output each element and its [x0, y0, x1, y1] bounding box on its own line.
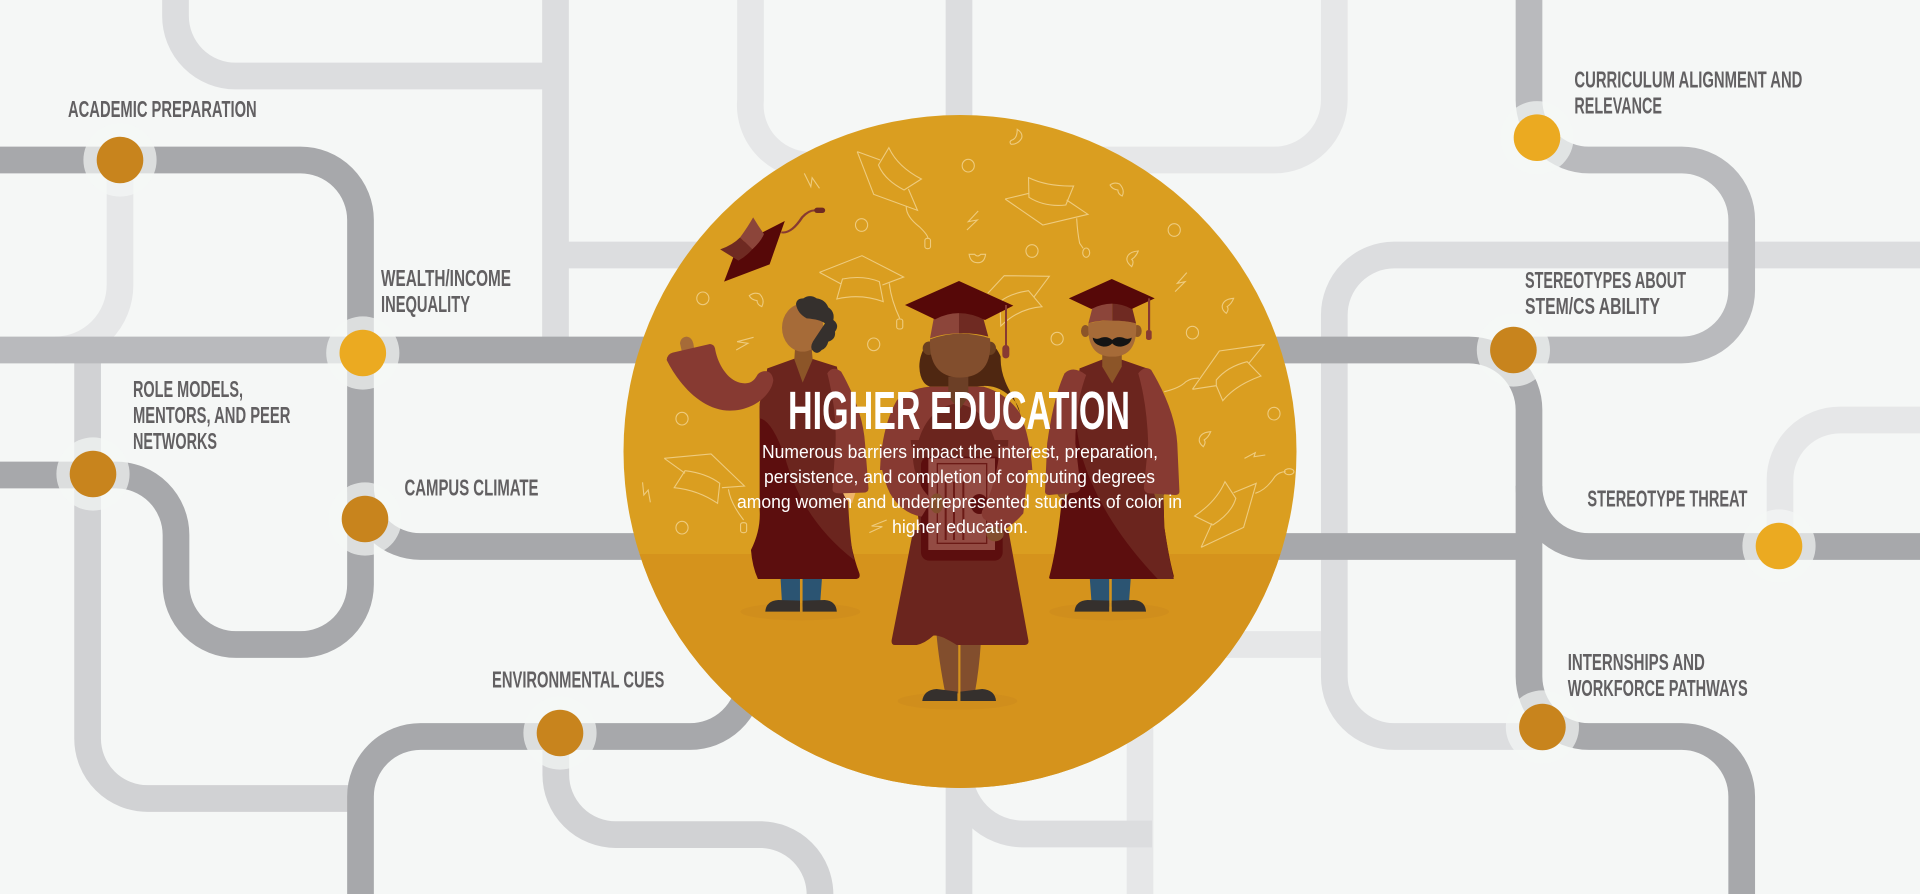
node: internships and workforce pathways [1506, 649, 1748, 764]
title: HIGHER EDUCATION [788, 381, 1130, 441]
node: role models [56, 376, 290, 511]
description text: Numerous barriers impact the interest, preparation, [762, 442, 1158, 462]
description text: among women and underrepresented students of color in [737, 492, 1182, 512]
doodles: flying caps, circles, squiggles [643, 129, 1294, 547]
node: academic preparation [68, 96, 257, 197]
mid-tone network lines [0, 0, 1742, 350]
figure: left graduate [667, 296, 868, 620]
node: curriculum alignment: RELEVANCE [1574, 93, 1662, 119]
figure: right graduate [1045, 279, 1179, 620]
description text: persistence, and completion of computing degrees [764, 467, 1155, 487]
node: stereotype threat: STEREOTYPE THREAT [1587, 486, 1748, 512]
node: internships and workforce pathways: WORKFORCE PATHWAYS [1568, 675, 1748, 701]
node: wealth/income inequality: WEALTH/INCOME [381, 265, 511, 291]
description text: higher education. [892, 517, 1028, 537]
node: campus climate [328, 474, 538, 556]
node: stereotype threat [1587, 486, 1816, 583]
node: environmental cues [492, 666, 664, 770]
node: environmental cues: ENVIRONMENTAL CUES [492, 666, 664, 692]
figure: center graduate [880, 281, 1032, 710]
node: internships and workforce pathways: INTERNSHIPS AND [1568, 649, 1705, 675]
node: stereotypes about STEM/CS ability [1477, 267, 1686, 387]
icon: mustache [1093, 337, 1132, 347]
node: stereotypes about STEM/CS ability: STEREOTYPES ABOUT [1525, 267, 1686, 293]
node: role models: MENTORS, AND PEER [133, 402, 290, 428]
central circle [600, 115, 1320, 794]
node: wealth/income inequality: INEQUALITY [381, 291, 470, 317]
node: role models: ROLE MODELS, [133, 376, 243, 402]
description text [737, 442, 1182, 537]
node: curriculum alignment [1500, 66, 1802, 174]
node: role models: NETWORKS [133, 428, 217, 454]
node: academic preparation: ACADEMIC PREPARATION [68, 96, 257, 122]
node: stereotypes about STEM/CS ability: STEM/CS ABILITY [1525, 293, 1660, 319]
node: campus climate: CAMPUS CLIMATE [404, 474, 538, 500]
thrown graduation cap [720, 208, 825, 282]
node: wealth/income inequality [326, 265, 511, 390]
